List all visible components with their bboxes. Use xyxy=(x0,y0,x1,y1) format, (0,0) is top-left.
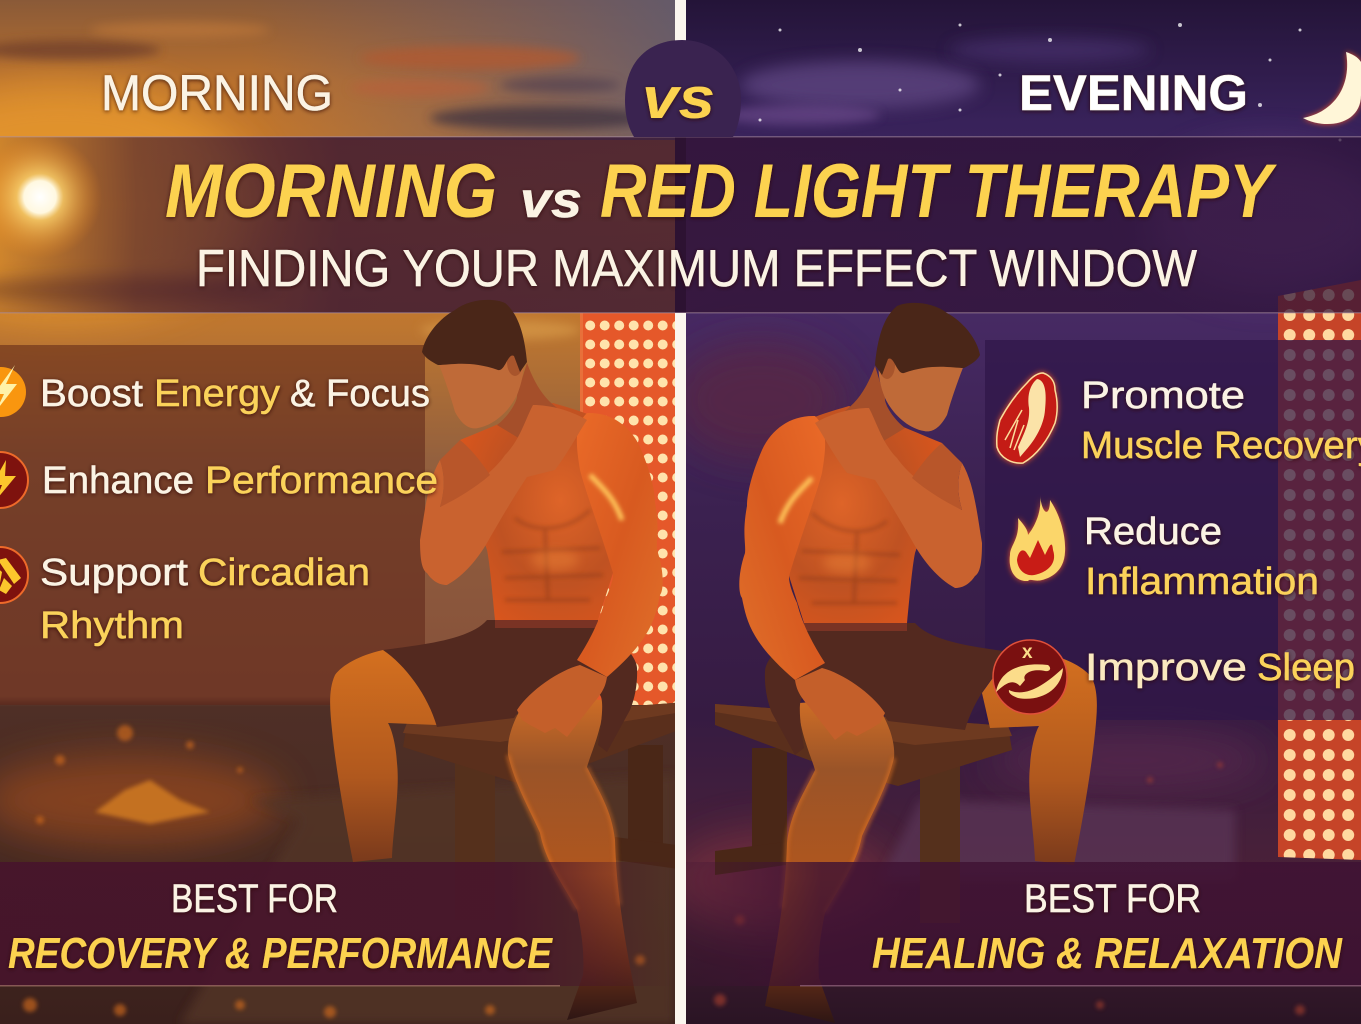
figure: evening man xyxy=(715,303,1097,1023)
morning benefits list xyxy=(0,365,438,647)
evening benefits list xyxy=(993,373,1361,714)
heading: evening: EVENING xyxy=(1019,65,1248,121)
callout: evening best for xyxy=(872,877,1343,978)
icon: sun xyxy=(0,135,102,259)
heading: morning: MORNING xyxy=(101,65,333,121)
subtitle: FINDING YOUR MAXIMUM EFFECT WINDOW xyxy=(196,240,1197,298)
icon: performance bolt xyxy=(0,452,28,508)
led panel: evening xyxy=(1278,280,1361,860)
bottom band: morning xyxy=(0,862,675,986)
panel: morning benefits background xyxy=(0,345,425,705)
benefit: reduce inflammation: Reduce xyxy=(1084,511,1222,553)
evening background xyxy=(670,0,1361,1024)
title: vs xyxy=(520,172,582,228)
benefit: boost energy and focus: & Focus xyxy=(290,373,430,415)
benefit: promote muscle recovery xyxy=(1081,375,1361,467)
panel: evening benefits background xyxy=(985,340,1361,720)
benefit: enhance performance xyxy=(42,460,438,502)
benefit: improve sleep: Sleep xyxy=(1257,647,1355,689)
benefit: reduce inflammation xyxy=(1084,511,1319,603)
vs badge: vs xyxy=(642,66,715,131)
benefit: enhance performance: Performance xyxy=(205,460,438,502)
benefit: support circadian rhythm: Rhythm xyxy=(40,605,184,647)
bottom band: evening xyxy=(686,862,1361,986)
icon: muscle recovery xyxy=(997,373,1057,463)
center divider xyxy=(675,0,686,1024)
morning background xyxy=(0,0,675,1024)
icon: sleep: x xyxy=(1022,642,1033,663)
benefit: boost energy and focus: Energy xyxy=(154,373,280,415)
icon: sleep xyxy=(993,640,1067,714)
benefit: boost energy and focus: Boost xyxy=(40,373,143,415)
led panel: morning xyxy=(580,313,675,705)
benefit: improve sleep: Improve xyxy=(1085,647,1247,689)
callout: evening best for: BEST FOR xyxy=(1024,877,1201,921)
icon: crescent moon xyxy=(1303,52,1361,124)
benefit: promote muscle recovery: Promote xyxy=(1081,375,1245,417)
icon: energy bolt xyxy=(0,365,26,417)
icon: circadian rhythm xyxy=(0,547,28,603)
benefit: boost energy and focus xyxy=(40,373,430,415)
title: MORNING xyxy=(165,149,497,234)
figure: morning man xyxy=(330,300,700,1020)
benefit: enhance performance: Enhance xyxy=(42,460,194,502)
callout: morning best for: RECOVERY & PERFORMANCE xyxy=(8,929,553,978)
benefit: support circadian rhythm: Circadian xyxy=(198,552,370,594)
icon: inflammation flame xyxy=(1010,495,1065,581)
callout: morning best for: BEST FOR xyxy=(171,877,338,921)
benefit: reduce inflammation: Inflammation xyxy=(1085,561,1319,603)
benefit: support circadian rhythm xyxy=(40,552,370,647)
benefit: support circadian rhythm: Support xyxy=(40,552,188,594)
callout: morning best for xyxy=(8,877,553,978)
vs badge xyxy=(625,40,741,137)
title band xyxy=(0,136,1361,314)
benefit: improve sleep xyxy=(1085,647,1355,689)
title xyxy=(165,149,1277,234)
